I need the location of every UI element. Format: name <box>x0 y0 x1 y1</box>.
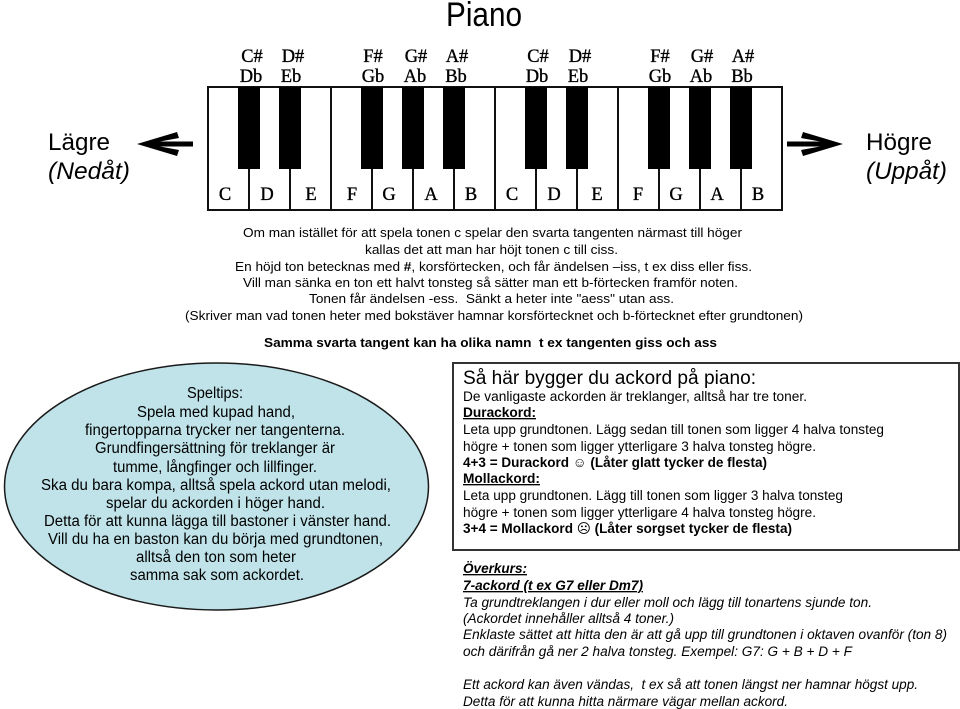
text block: explanation of sharps and flats: En höjd ton betecknas med #, korsförtecken, och får ändelsen –iss, t ex diss eller fiss. <box>235 259 752 274</box>
label: lower direction <box>48 129 130 185</box>
text block: explanation of sharps and flats: (Skriver man vad tonen heter med bokstäver hamnar korsförtecknet och b-förtecknet efter grundtonen) <box>185 308 803 323</box>
tips text: Ska du bara kompa, alltså spela ackord utan melodi, <box>41 477 391 494</box>
callout: same key different names: Samma svarta tangent kan ha olika namn t ex tangenten giss och ass <box>264 335 717 350</box>
sharp names: F# <box>363 47 383 67</box>
flat names: Db <box>526 67 548 87</box>
label: lower direction: (Nedåt) <box>48 158 130 185</box>
minor chord: Mollackord: <box>463 471 540 486</box>
white key names: G <box>669 185 683 205</box>
text block: explanation of sharps and flats <box>185 225 803 323</box>
sharp names: A# <box>732 47 754 67</box>
tips text <box>41 385 391 584</box>
flat names: Db <box>240 67 262 87</box>
sharp names: D# <box>282 47 304 67</box>
flat names: Bb <box>445 67 467 87</box>
white key names: E <box>591 185 603 205</box>
tips text: Vill du ha en baston kan du börja med grundtonen, <box>48 531 383 548</box>
minor chord <box>463 471 843 536</box>
sharp names: A# <box>446 47 468 67</box>
sharp names: D# <box>569 47 591 67</box>
label: higher direction: Högre <box>866 129 932 156</box>
white key names: E <box>305 185 317 205</box>
sharp names: F# <box>650 47 670 67</box>
text block: advanced course: och därifrån gå ner 2 halva tonsteg. Exempel: G7: G + B + D + F <box>463 644 853 659</box>
tips text: Detta för att kunna lägga till bastoner i vänster hand. <box>44 513 391 530</box>
flat names <box>240 67 753 87</box>
white key names: F <box>633 185 643 205</box>
tips text: Speltips: <box>187 385 243 402</box>
minor chord: 3+4 = Mollackord ☹ (Låter sorgset tycker de flesta) <box>463 521 792 536</box>
text block: explanation of sharps and flats: kallas det att man har höjt tonen c till ciss. <box>365 242 618 257</box>
text block: advanced course: 7-ackord (t ex G7 eller Dm7) <box>463 578 644 593</box>
major chord: 4+3 = Durackord ☺ (Låter glatt tycker de flesta) <box>463 455 767 470</box>
flat names: Gb <box>649 67 671 87</box>
flat names: Ab <box>404 67 426 87</box>
ellipse background <box>4 363 428 610</box>
major chord: Leta upp grundtonen. Lägg sedan till tonen som ligger 4 halva tonsteg <box>463 422 884 437</box>
box border <box>453 363 959 550</box>
white key names: B <box>465 185 477 205</box>
major chord: högre + tonen som ligger ytterligare 3 halva tonsteg högre. <box>463 439 816 454</box>
tips text: samma sak som ackordet. <box>130 567 304 584</box>
white key names: F <box>347 185 357 205</box>
text block: advanced course: Detta för att kunna hitta närmare vägar mellan ackord. <box>463 694 788 709</box>
black keys <box>238 87 752 169</box>
label: higher direction: (Uppåt) <box>866 158 947 185</box>
label: higher direction <box>866 129 947 185</box>
white key names: D <box>260 185 274 205</box>
text block: advanced course: Ett ackord kan även vändas, t ex så att tonen längst ner hamnar högst upp. <box>463 677 918 692</box>
text block: explanation of sharps and flats: Om man istället för att spela tonen c spelar den svarta tangenten närmast till höger <box>243 225 743 240</box>
flat names: Eb <box>281 67 301 87</box>
white key names: B <box>752 185 764 205</box>
flat names: Bb <box>731 67 753 87</box>
text block: advanced course: Enklaste sättet att hitta den är att gå upp till grundtonen i oktaven ovanför (ton 8) <box>463 627 947 642</box>
intro line: De vanligaste ackorden är treklanger, alltså har tre toner. <box>463 389 807 404</box>
minor chord: högre + tonen som ligger ytterligare 4 halva tonsteg högre. <box>463 505 816 520</box>
tips text: Spela med kupad hand, <box>137 404 295 421</box>
tips text: fingertopparna trycker ner tangenterna. <box>85 422 345 439</box>
text block: explanation of sharps and flats: Vill man sänka en ton ett halvt tonsteg så sätter man ett b-förtecken framför noten. <box>243 275 738 290</box>
panel: playing tips <box>4 363 428 610</box>
tips text: alltså den ton som heter <box>136 549 296 566</box>
panel: how to build chords <box>453 363 959 550</box>
sharp names: G# <box>691 47 713 67</box>
text block: advanced course: Överkurs: <box>463 561 527 576</box>
icon: left arrow <box>137 132 193 156</box>
white key names: C <box>219 185 231 205</box>
label: lower direction: Lägre <box>48 129 110 156</box>
white key names: A <box>424 185 438 205</box>
white key names: G <box>382 185 396 205</box>
flat names: Ab <box>690 67 712 87</box>
text block: advanced course: (Ackordet innehåller alltså 4 toner.) <box>463 611 674 626</box>
flat names: Eb <box>568 67 588 87</box>
sharp names <box>241 47 754 67</box>
text block: advanced course: Ta grundtreklangen i dur eller moll och lägg till tonartens sjunde ton. <box>463 595 872 610</box>
tips text: spelar du ackorden i höger hand. <box>106 495 325 512</box>
icon: right arrow <box>787 132 843 156</box>
flat names: Gb <box>362 67 384 87</box>
major chord: Durackord: <box>463 405 536 420</box>
tips text: tumme, långfinger och lillfinger. <box>113 459 317 476</box>
text block: advanced course <box>463 561 947 709</box>
white key names: D <box>547 185 561 205</box>
white key names <box>219 185 764 205</box>
white key names: C <box>506 185 518 205</box>
sharp names: C# <box>527 47 549 67</box>
white key names: A <box>710 185 724 205</box>
key dividers <box>248 87 742 210</box>
sharp names: C# <box>241 47 263 67</box>
major chord <box>463 405 884 470</box>
box heading: Så här bygger du ackord på piano: <box>463 368 756 389</box>
piano keyboard <box>208 47 782 210</box>
text block: explanation of sharps and flats: Tonen får ändelsen -ess. Sänkt a heter inte "aess" utan ass. <box>309 291 674 306</box>
sharp names: G# <box>405 47 427 67</box>
white keys outline <box>208 87 782 210</box>
minor chord: Leta upp grundtonen. Lägg till tonen som ligger 3 halva tonsteg <box>463 488 843 503</box>
tips text: Grundfingersättning för treklanger är <box>95 440 335 457</box>
